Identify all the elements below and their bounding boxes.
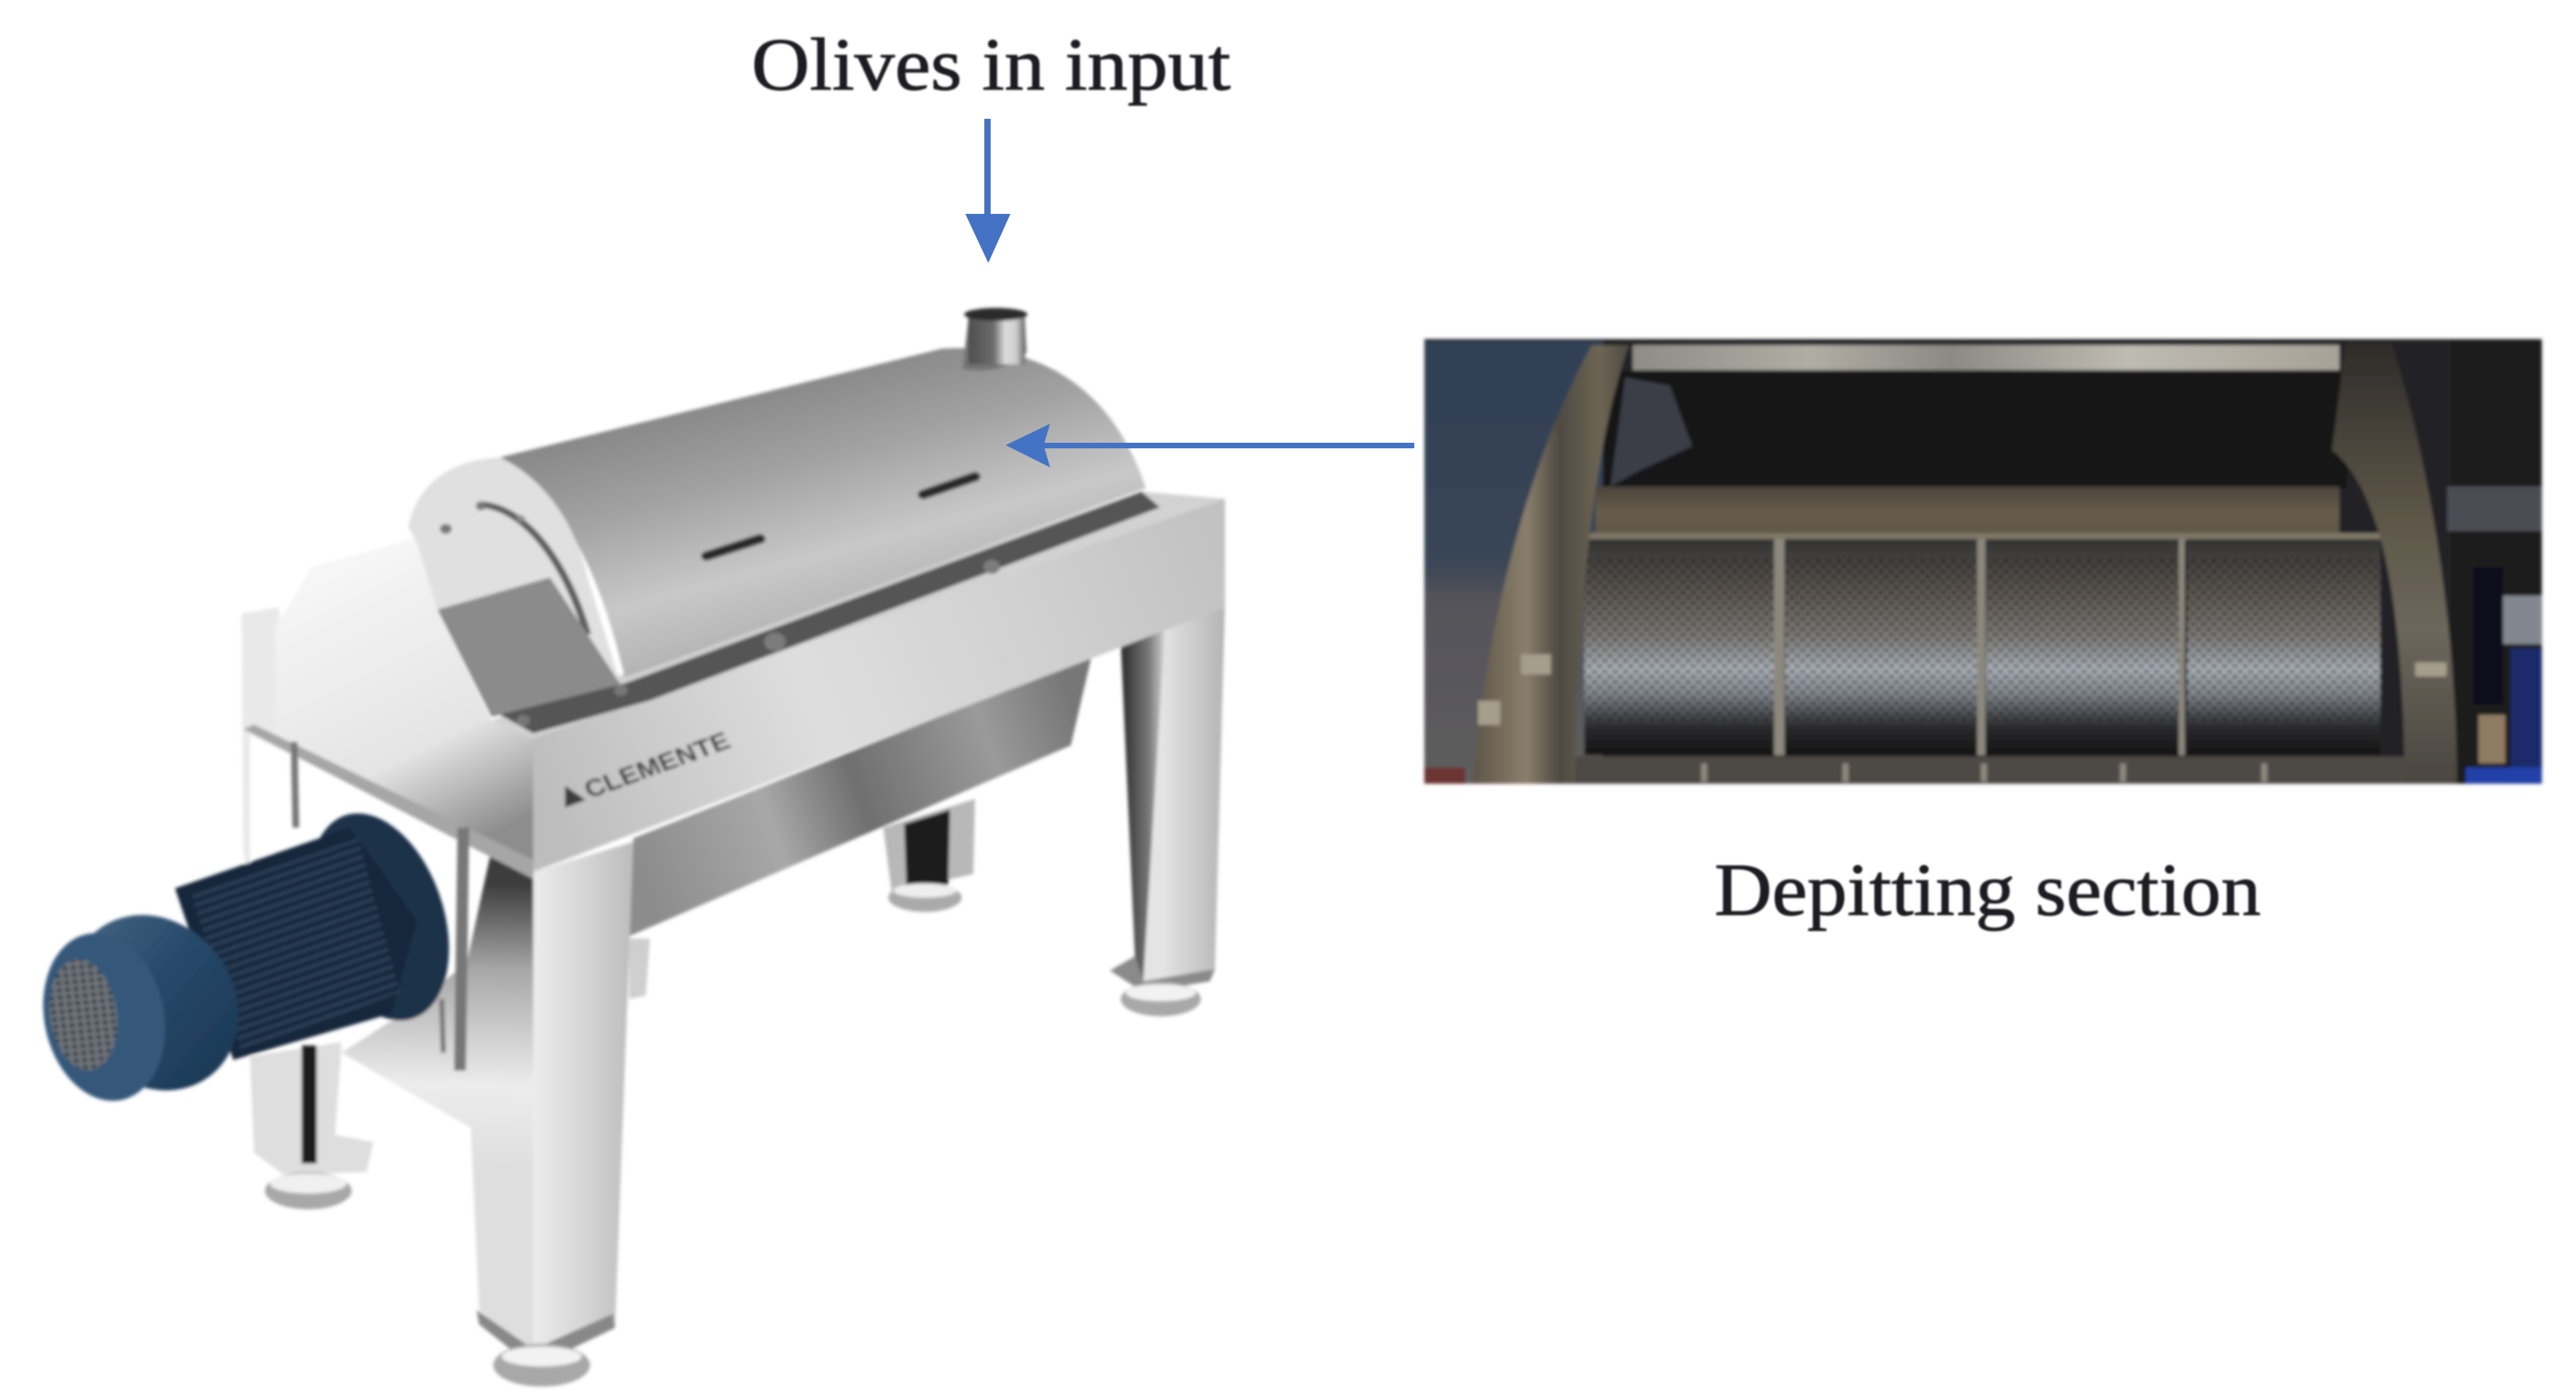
- back shelf: [1585, 486, 2380, 540]
- bracket bar: [243, 725, 533, 879]
- front leg face: [533, 842, 634, 1357]
- motor flange: [286, 801, 472, 1033]
- front leg side: [341, 849, 533, 1357]
- drum support rod: [629, 939, 650, 999]
- rear-right leg: [1110, 604, 1225, 1016]
- motor fan cover: [31, 896, 264, 1110]
- mounting rods: [294, 742, 463, 1071]
- photo: depitting section: [1425, 339, 2542, 783]
- side plate: [242, 608, 280, 899]
- collection hopper: [629, 656, 1092, 936]
- clear end cap: [409, 457, 621, 684]
- label: Depitting section: Depitting section: [1714, 849, 2261, 931]
- front foot: [477, 1310, 615, 1387]
- top bar: [1633, 345, 2339, 370]
- screen drum panels: [1585, 539, 2380, 756]
- bottom strip: [1558, 756, 2407, 783]
- depitting cover drum: [500, 348, 1146, 677]
- cavity side panel: [1611, 378, 1692, 486]
- rail: [500, 492, 1160, 733]
- motor body: [175, 828, 417, 1060]
- arrow: depitting section to drum: [1006, 424, 1414, 467]
- label: Olives in input: Olives in input: [751, 24, 1231, 106]
- end housing: [250, 538, 533, 872]
- inlet pipe: [962, 308, 1027, 371]
- front panel: [533, 499, 1225, 872]
- blue background wall: [1425, 341, 1603, 783]
- inner dark cavity: [1603, 371, 2347, 489]
- right curved frame: [2332, 343, 2457, 783]
- machine: depitter with motor: [31, 308, 1225, 1387]
- drum separators: [1774, 539, 2185, 756]
- left curved frame: [1473, 345, 1629, 783]
- rear-left leg: [250, 1042, 373, 1209]
- rear-middle leg: [883, 799, 975, 912]
- chute flap: [437, 577, 621, 717]
- right-side equipment: [2447, 341, 2542, 783]
- frame highlights: [1478, 654, 2447, 725]
- brand logo: CLEMENTE: [580, 727, 735, 804]
- top deck: [492, 492, 1225, 738]
- inspection slots: [706, 477, 975, 556]
- arrow: olives into inlet: [965, 119, 1010, 263]
